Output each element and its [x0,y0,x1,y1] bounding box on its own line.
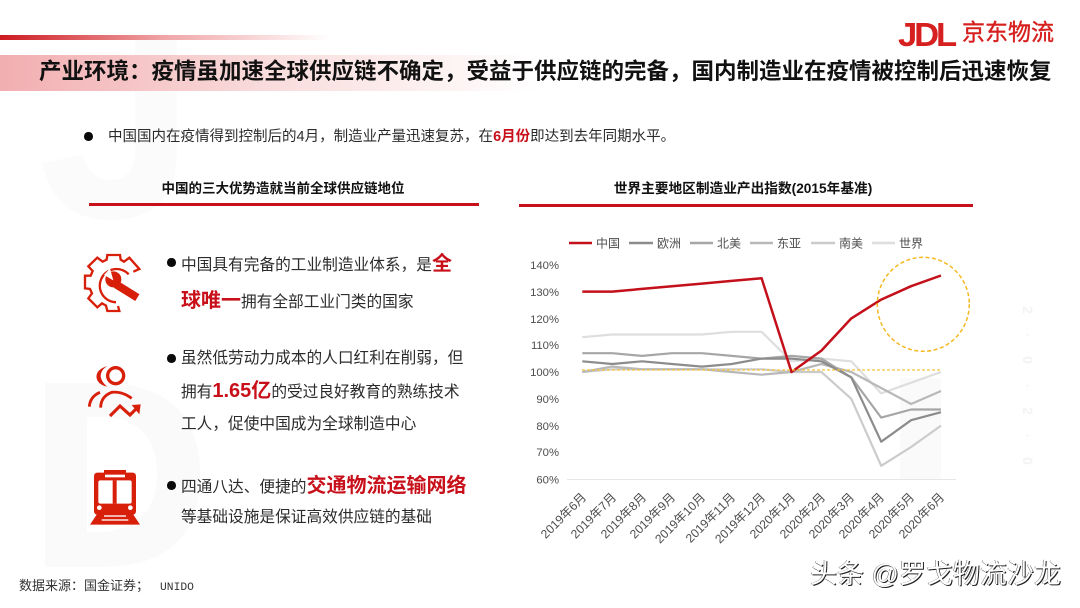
legend: 北美 [717,236,741,250]
right heading rule [519,204,973,207]
y axis labels: 140% [530,260,559,272]
right panel heading: 世界主要地区制造业产出指数(2015年基准) [614,181,872,196]
platform watermark: 头条 @罗戈物流沙龙 [810,559,1061,589]
100% dashed reference line [582,369,941,371]
bullet 1 text: 中国具有完备的工业制造业体系，是全 [181,253,452,275]
top gradient rule [0,35,330,40]
x axis labels: 2019年11月 [683,490,738,545]
bullet 1 text [167,252,452,312]
series: 北美 [582,353,941,418]
x axis labels: 2019年9月 [627,490,678,541]
logo: JDL 京东物流 [898,16,1054,53]
x axis labels: 2019年8月 [598,490,649,541]
x axis labels: 2020年1月 [747,490,798,541]
y axis labels: 100% [530,367,559,379]
legend: 中国 [596,236,620,250]
y axis labels: 110% [531,340,559,352]
left heading rule [89,203,479,206]
series lines [582,276,941,466]
y axis labels: 90% [536,394,559,406]
watermark year 2020: · [1020,384,1036,388]
series: 东亚 [582,364,941,404]
watermark year 2020: 2 [1020,407,1036,415]
y axis labels [530,260,559,486]
highlight dashed circle [877,257,969,351]
logo: JDL 京东物流: 京东物流 [962,19,1054,45]
shaded forecast band [900,378,941,480]
icon: people with rising arrow [88,366,141,418]
bullet 3 text [167,474,466,526]
y axis labels: 60% [536,474,559,486]
data source: 数据来源：国金证券； UNIDO [19,578,194,594]
title: 产业环境：疫情虽加速全球供应链不确定，受益于供应链的完备，国内制造业在疫情被控制后迅速恢复 [39,59,1052,84]
x axis line [567,478,956,480]
bullet 2 text: 拥有1.65亿的受过良好教育的熟练技术 [181,380,460,402]
title band [0,55,1080,91]
series: 南美 [582,369,941,466]
bullet 3 text: 等基础设施是保证高效供应链的基础 [181,509,432,526]
x axis labels: 2020年2月 [777,490,828,541]
y axis labels: 130% [530,287,559,299]
x axis labels: 2020年4月 [836,490,887,541]
icon: train [90,470,140,525]
watermark year 2020 [1020,306,1036,465]
line chart [530,236,970,545]
watermark year 2020: · [1020,333,1036,337]
logo: JDL 京东物流: JDL [898,16,954,53]
legend: 欧洲 [657,236,681,250]
x axis labels: 2020年6月 [896,490,947,541]
summary bullet: 中国国内在疫情得到控制后的4月，制造业产量迅速复苏，在6月份即达到去年同期水平。 [108,128,675,144]
series: 中国 [582,276,941,372]
series: 世界 [582,332,941,393]
x axis labels: 2020年5月 [866,490,917,541]
y axis labels: 120% [530,314,559,326]
left panel heading: 中国的三大优势造就当前全球供应链地位 [162,181,404,196]
bullet 3 text: 四通八达、便捷的交通物流运输网络 [181,475,466,497]
x axis labels [538,490,947,546]
x axis labels: 2020年3月 [806,490,857,541]
y axis labels: 80% [536,421,559,433]
x axis labels: 2019年10月 [652,490,708,545]
series: 欧洲 [582,359,941,442]
watermark year 2020: · [1020,434,1036,438]
x axis labels: 2019年12月 [712,490,768,545]
y axis labels: 70% [536,447,559,459]
watermark year 2020: 2 [1020,306,1036,314]
legend: 东亚 [777,236,801,250]
watermark year 2020: 0 [1020,457,1036,465]
bullet 2 text [167,349,463,433]
legend: 世界 [899,236,923,250]
bullet 2 text: 虽然低劳动力成本的人口红利在削弱，但 [181,350,463,367]
legend [569,236,923,250]
x axis labels: 2019年7月 [568,490,619,541]
icon: gear and wrench [84,254,142,312]
legend: 南美 [839,236,863,250]
watermark year 2020: 0 [1020,356,1036,364]
bullet 2 text: 工人，促使中国成为全球制造中心 [181,416,416,433]
bullet 1 text: 球唯一拥有全部工业门类的国家 [181,290,414,312]
x axis labels: 2019年6月 [538,490,589,541]
